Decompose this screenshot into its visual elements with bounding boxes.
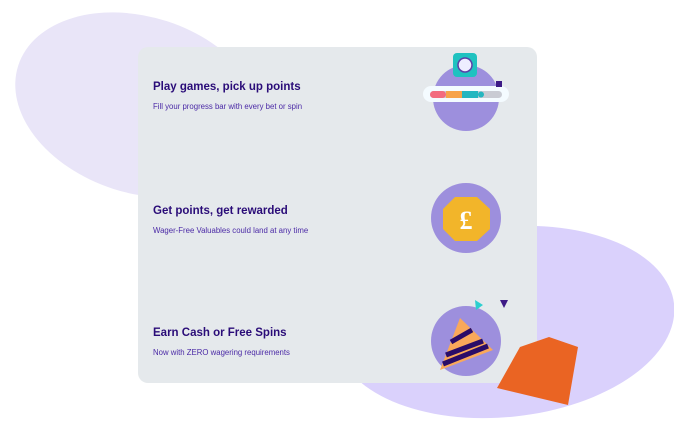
- blob: top-left: [0, 0, 289, 228]
- step 3 heading: Earn Cash or Free Spins: [153, 327, 287, 339]
- icon: progress bar: [423, 53, 509, 131]
- icon: pound coin: [431, 183, 501, 253]
- step 1 text: Fill your progress bar with every bet or spin: [153, 102, 302, 111]
- blob: bottom-right: [326, 210, 674, 431]
- step 2 heading: Get points, get rewarded: [153, 205, 288, 217]
- step 1 heading: Play games, pick up points: [153, 81, 301, 93]
- step 2 text: Wager-Free Valuables could land at any time: [153, 226, 308, 235]
- icon: party popper: [431, 300, 508, 376]
- decorative orange shape: [497, 337, 578, 405]
- card panel: [138, 47, 537, 383]
- step 3 text: Now with ZERO wagering requirements: [153, 348, 290, 357]
- icon: pound coin: £: [460, 206, 472, 235]
